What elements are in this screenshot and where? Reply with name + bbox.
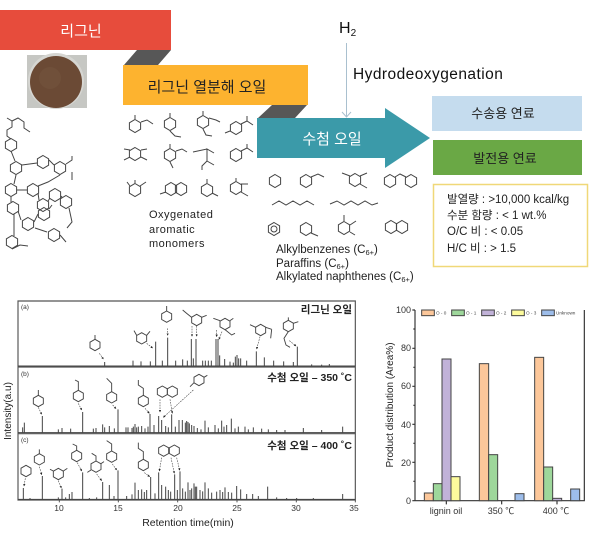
chart frame: [18, 301, 355, 500]
x axis title: retention time: Retention time(min): [142, 517, 234, 529]
caption: hydrocarbon classes: 6+: [365, 248, 375, 257]
x axis tick labels: 25: [232, 503, 242, 513]
x axis tick labels: 35: [349, 503, 359, 513]
legend: O - 0: [436, 310, 447, 315]
box: fuel properties: H/C 비 : > 1.5: [447, 242, 516, 255]
bar chart y axis labels: 40: [401, 420, 411, 430]
arrow: hydrotreated oil: [257, 108, 430, 168]
bar chart y axis labels: [396, 305, 411, 506]
bars: 400 C: [535, 357, 580, 501]
caption: hydrocarbon classes: ): [410, 271, 414, 283]
bar chart y axis labels: 20: [401, 458, 411, 468]
bar chart y axis title: Product distribution (Area%): [385, 342, 396, 468]
box: fuel properties: O/C 비 : < 0.05: [447, 225, 523, 238]
banner: lignin: [0, 10, 171, 50]
molecules: hydrocarbons: [268, 173, 417, 236]
banner: lignin: 리그닌: [60, 23, 102, 40]
caption: hydrocarbon classes: 6+: [337, 262, 346, 271]
arrow: hydrogen input: [342, 43, 351, 117]
bar chart category labels: 350 ℃: [488, 506, 514, 516]
caption: hydrocarbon classes: ): [374, 244, 378, 256]
box: lignin pyrolysis oil: 리그닌 열분해 오일: [148, 79, 266, 96]
box: fuel properties: 수분 함량 : < 1 wt.%: [447, 209, 547, 222]
panel labels: (b): [21, 371, 29, 378]
chromatogram titles: 리그닌 오일: [301, 303, 352, 316]
legend: O - 1: [466, 310, 477, 315]
bar chart y axis labels: 100: [396, 305, 411, 315]
panel labels: [21, 304, 29, 444]
box: fuel properties: [434, 184, 588, 266]
chart: gas chromatograms: [18, 301, 355, 502]
caption: hydrocarbon classes: ): [345, 258, 349, 270]
bar chart y axis labels: 80: [401, 343, 411, 353]
box: transport fuel: [432, 96, 582, 131]
trace: hydrotreated oil at 350 C: [18, 409, 355, 433]
axes: [412, 310, 584, 504]
caption: hydrocarbon classes: Paraffins (C: [276, 258, 337, 270]
trace: lignin oil: [18, 338, 355, 366]
molecules: oxygenated aromatic monomers: [124, 111, 253, 196]
bar chart category labels: [430, 506, 569, 516]
x axis tick labels: 10: [54, 503, 64, 513]
bar chart y axis labels: 60: [401, 381, 411, 391]
bars: lignin oil: [424, 359, 460, 501]
structure: lignin polymer: [5, 118, 72, 249]
legend: [422, 310, 576, 316]
legend: O - 3: [526, 310, 537, 315]
caption: oxygenated aromatic monomers: monomers: [149, 238, 205, 250]
box: power generation fuel: [433, 140, 582, 175]
caption: hydrocarbon classes: 6+: [401, 275, 410, 284]
x axis tick labels: [54, 503, 359, 513]
caption: hydrocarbon classes: Alkylbenzenes (C: [276, 244, 365, 256]
chromatogram titles: 수첨 오일 – 400 ˚C: [267, 439, 352, 452]
legend: O - 2: [496, 310, 507, 315]
bars: 350 C: [479, 364, 524, 501]
bar chart category labels: lignin oil: [430, 506, 462, 516]
label: hydrodeoxygenation: Hydrodeoxygenation: [353, 66, 503, 83]
caption: oxygenated aromatic monomers: Oxygenated: [149, 209, 213, 221]
molecules and arrows: lignin oil: [90, 306, 298, 359]
label: hydrogen: H: [339, 20, 351, 37]
panel labels: (a): [21, 304, 29, 311]
connector: oil to hydrotreated oil: [258, 105, 307, 118]
panel labels: (c): [21, 437, 29, 444]
bar chart y axis labels: 0: [406, 496, 411, 506]
legend: Unknown: [556, 310, 576, 315]
caption: hydrocarbon classes: Alkylated naphthenes (C: [276, 271, 401, 283]
bar chart category labels: 400 ℃: [543, 506, 569, 516]
chromatogram titles: 수첨 오일 – 350 ˚C: [267, 371, 352, 384]
arrow: hydrotreated oil: 수첨 오일: [302, 131, 362, 148]
molecules and arrows: 400 C oil: [21, 441, 180, 488]
connector: lignin to pyrolysis oil: [124, 50, 171, 65]
y axis label: intensity: Intensity(a.u): [3, 382, 14, 440]
x axis tick labels: 20: [173, 503, 183, 513]
box: transport fuel: 수송용 연료: [471, 106, 535, 121]
trace: hydrotreated oil at 400 C: [18, 470, 355, 499]
x axis ticks: [59, 500, 355, 502]
label: hydrogen: 2: [351, 28, 357, 39]
chart: product distribution bars: [412, 310, 584, 504]
photo: lignin powder: [27, 53, 87, 109]
box: lignin pyrolysis oil: [123, 65, 308, 105]
box: power generation fuel: 발전용 연료: [473, 151, 537, 166]
x axis tick labels: 30: [291, 503, 301, 513]
x axis tick labels: 15: [113, 503, 123, 513]
caption: oxygenated aromatic monomers: aromatic: [149, 224, 195, 236]
box: fuel properties: 발열량 : >10,000 kcal/kg: [447, 193, 569, 206]
chromatogram titles: [267, 303, 352, 452]
molecules and arrows: 350 C oil: [33, 374, 207, 417]
